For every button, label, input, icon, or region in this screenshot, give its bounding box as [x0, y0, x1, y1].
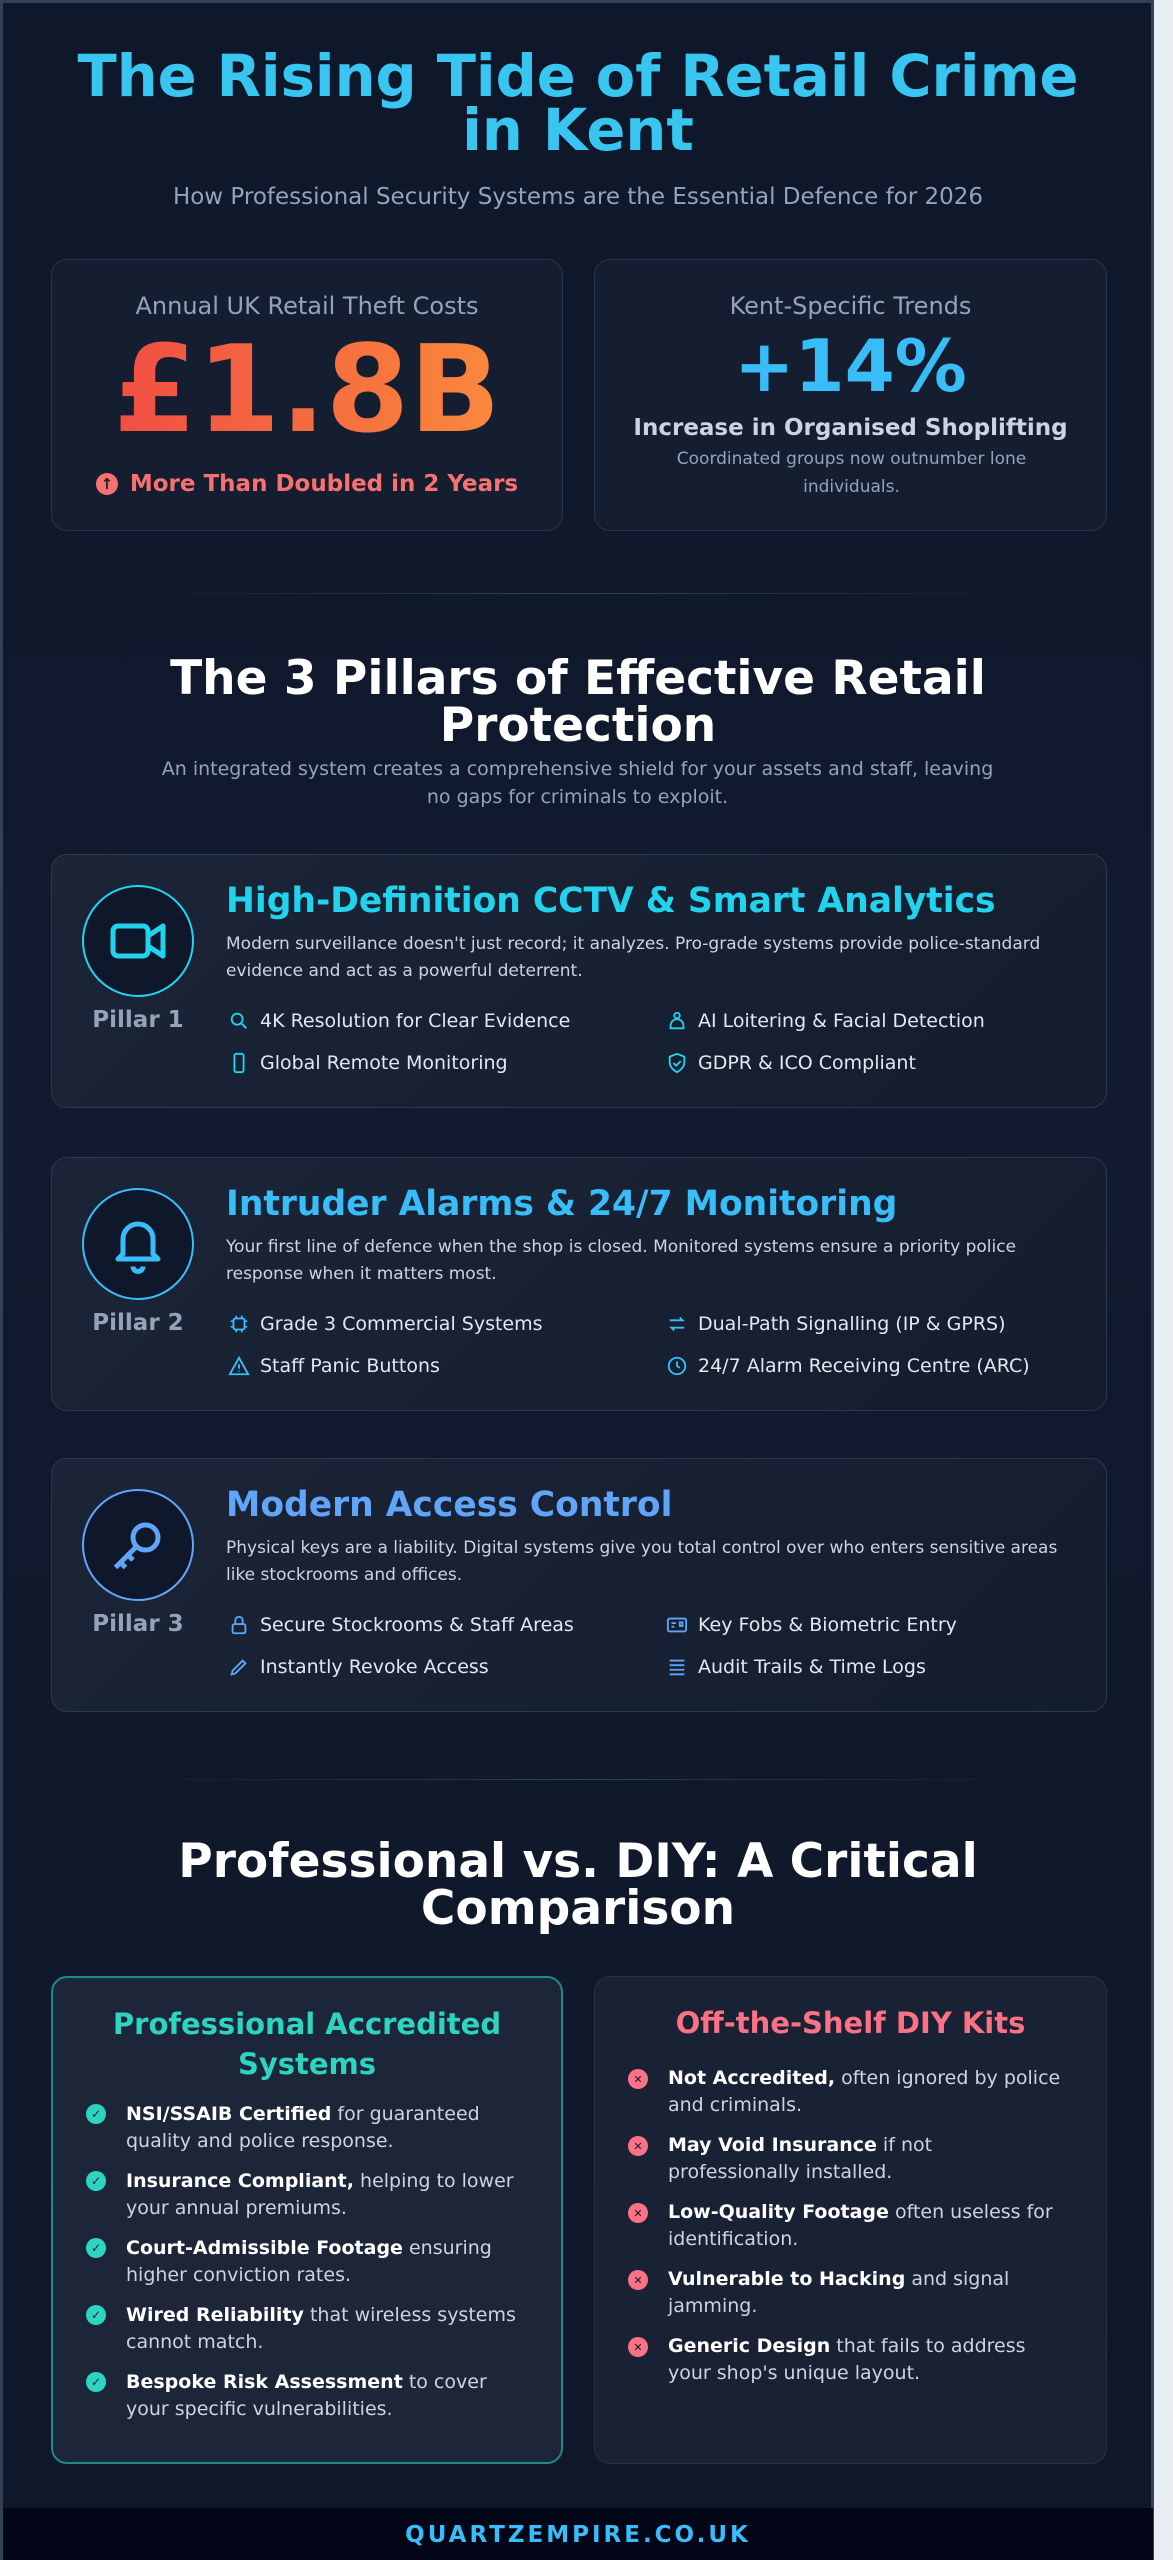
heading	[113, 2007, 501, 2081]
heading: Off-the-Shelf DIY Kits	[676, 2006, 1025, 2040]
feature: AI Loitering & Facial Detection	[698, 1010, 985, 1032]
list: Bespoke Risk Assessment to cover your specific vulnerabilities.	[126, 2371, 487, 2420]
icon: camera	[82, 885, 194, 997]
list: Court-Admissible Footage ensuring higher conviction rates.	[126, 2237, 492, 2286]
label: Kent-Specific Trends	[730, 292, 971, 320]
list: ✕	[633, 2340, 643, 2354]
list: ✕	[633, 2072, 643, 2086]
footer: QUARTZEMPIRE.CO.UK	[405, 2522, 751, 2548]
list: ✓	[91, 2174, 101, 2188]
stat card: Kent trends	[594, 259, 1107, 531]
stat card: UK theft costs	[51, 259, 563, 531]
feature: Grade 3 Commercial Systems	[260, 1313, 543, 1335]
comparison heading: Professional vs. DIY: A Critical	[178, 1834, 978, 1889]
pillars heading	[170, 651, 986, 753]
list: ✕	[633, 2140, 643, 2152]
list: ✓	[91, 2241, 101, 2255]
feature: Staff Panic Buttons	[260, 1355, 440, 1377]
list: May Void Insurance if not professionally installed.	[668, 2134, 932, 2183]
pillar label: Pillar 2	[92, 1310, 184, 1336]
trend note: ↑	[101, 475, 113, 493]
heading: Increase in Organised Shoplifting	[633, 415, 1068, 441]
feature: Secure Stockrooms & Staff Areas	[260, 1614, 574, 1636]
pillars heading: The 3 Pillars of Effective Retail	[170, 651, 986, 706]
list: Vulnerable to Hacking and signal jamming.	[668, 2268, 1009, 2317]
description: Modern surveillance doesn't just record; it analyzes. Pro-grade systems provide police-standard evidence and act as a powerful deterrent.	[226, 934, 1040, 981]
title: The Rising Tide of Retail Crime	[77, 43, 1079, 110]
list: Insurance Compliant, helping to lower your annual premiums.	[126, 2170, 514, 2219]
list: Not Accredited, often ignored by police and criminals.	[668, 2067, 1060, 2116]
feature: Instantly Revoke Access	[260, 1656, 489, 1678]
feature: 24/7 Alarm Receiving Centre (ARC)	[698, 1355, 1030, 1377]
heading: Professional Accredited	[113, 2007, 501, 2041]
feature: Audit Trails & Time Logs	[698, 1656, 926, 1678]
list: ✕	[633, 2274, 643, 2286]
heading: Modern Access Control	[226, 1485, 672, 1525]
feature: Key Fobs & Biometric Entry	[698, 1614, 957, 1636]
list	[86, 2103, 516, 2420]
list: ✓	[91, 2308, 101, 2322]
icon: bell	[82, 1188, 194, 1300]
label: Annual UK Retail Theft Costs	[136, 292, 478, 320]
pillar label: Pillar 3	[92, 1611, 184, 1637]
big number: £1.8B	[113, 321, 501, 460]
percentage: +14%	[734, 324, 967, 408]
pillar label: Pillar 1	[92, 1007, 184, 1033]
footer	[3, 2508, 1153, 2560]
title: in Kent	[462, 97, 694, 164]
description: Physical keys are a liability. Digital systems give you total control over who enters sensitive areas like stockrooms and offices.	[226, 1538, 1057, 1585]
panel: pillar 1 CCTV	[51, 854, 1107, 1108]
list	[628, 2067, 1060, 2384]
list: NSI/SSAIB Certified for guaranteed quality and police response.	[126, 2103, 480, 2152]
panel: DIY kits	[594, 1976, 1107, 2464]
subtitle: How Professional Security Systems are the Essential Defence for 2026	[173, 184, 983, 210]
list: Low-Quality Footage often useless for identification.	[668, 2201, 1053, 2250]
list: ✓	[91, 2375, 101, 2389]
panel: pillar 2 alarms	[51, 1157, 1107, 1411]
icon: key	[82, 1489, 194, 1601]
description: Coordinated groups now outnumber lone individuals.	[677, 449, 1026, 497]
feature: Dual-Path Signalling (IP & GPRS)	[698, 1313, 1006, 1335]
heading: High-Definition CCTV & Smart Analytics	[226, 881, 996, 921]
heading: Intruder Alarms & 24/7 Monitoring	[226, 1184, 897, 1224]
pillars subtitle: An integrated system creates a comprehensive shield for your assets and staff, leaving no gaps for criminals to exploit.	[162, 758, 993, 808]
feature: GDPR & ICO Compliant	[698, 1052, 916, 1074]
trend note: More Than Doubled in 2 Years	[130, 471, 518, 497]
comparison heading: Comparison	[421, 1881, 735, 1936]
panel: pillar 3 access control	[51, 1458, 1107, 1712]
list: Generic Design that fails to address your shop's unique layout.	[668, 2335, 1026, 2384]
list: Wired Reliability that wireless systems cannot match.	[126, 2304, 516, 2353]
list: ✓	[91, 2107, 101, 2121]
description: Your first line of defence when the shop is closed. Monitored systems ensure a priority police response when it matters most.	[226, 1237, 1016, 1284]
comparison heading	[178, 1834, 978, 1936]
feature: 4K Resolution for Clear Evidence	[260, 1010, 570, 1032]
panel: professional systems	[51, 1976, 563, 2464]
heading: Systems	[238, 2047, 376, 2081]
title	[77, 43, 1079, 164]
feature: Global Remote Monitoring	[260, 1052, 508, 1074]
list: ✕	[633, 2206, 643, 2220]
pillars heading: Protection	[440, 698, 716, 753]
